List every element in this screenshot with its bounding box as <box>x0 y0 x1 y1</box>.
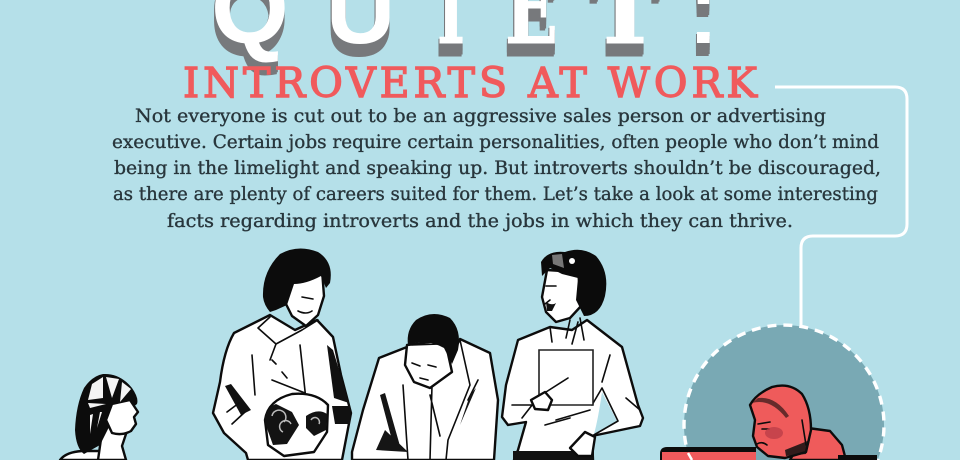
figure: woman with clipboard <box>502 250 643 460</box>
intro paragraph: facts regarding introverts and the jobs in which they can thrive. <box>167 211 793 232</box>
title: QUIET! <box>211 0 718 66</box>
red introvert circle <box>660 325 884 460</box>
figure: man leaning forward <box>352 314 498 460</box>
figure: tall man with curly-haired object <box>213 248 351 460</box>
intro paragraph: executive. Certain jobs require certain personalities, often people who don’t mind <box>112 132 879 153</box>
clipboard paper <box>539 350 593 405</box>
connector line <box>775 87 907 327</box>
red woman at desk <box>750 386 846 460</box>
intro paragraph: as there are plenty of careers suited for them. Let’s take a look at some interesting <box>113 184 878 205</box>
intro paragraph: being in the limelight and speaking up. But introverts shouldn’t be discouraged, <box>114 158 881 179</box>
intro paragraph <box>112 106 881 232</box>
figure: girl at left <box>60 374 138 460</box>
red laptop <box>660 447 756 460</box>
intro paragraph: Not everyone is cut out to be an aggressive sales person or advertising <box>135 106 826 127</box>
desk edge <box>838 455 877 460</box>
heading: introverts at work: INTROVERTS AT WORK <box>183 59 758 107</box>
